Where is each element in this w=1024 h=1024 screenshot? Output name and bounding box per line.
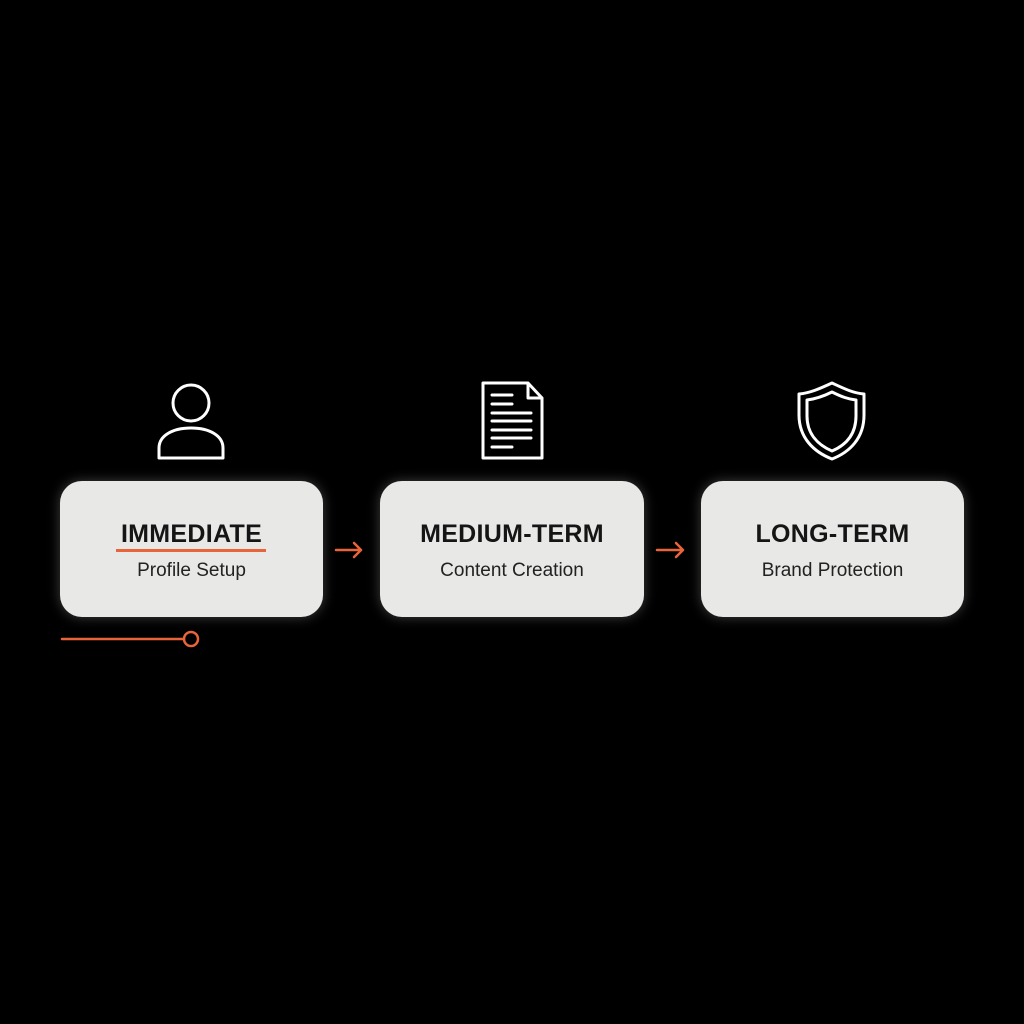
panel: immediate [60, 481, 323, 617]
arrow: immediate to medium [336, 543, 361, 557]
progress indicator [62, 632, 198, 646]
icon: shield [799, 383, 864, 459]
icon: person [159, 385, 223, 458]
text: profile setup: Profile Setup [137, 560, 246, 581]
panel: medium-term [380, 481, 644, 617]
heading: medium-term: MEDIUM-TERM [420, 520, 604, 548]
panel: long-term [701, 481, 964, 617]
underline accent [116, 549, 266, 552]
arrow: medium to long [657, 543, 683, 557]
heading: immediate: IMMEDIATE [121, 520, 262, 548]
text: content creation: Content Creation [440, 560, 584, 581]
icon: document [483, 383, 542, 458]
text: brand protection: Brand Protection [762, 560, 903, 581]
heading: long-term: LONG-TERM [755, 520, 910, 548]
